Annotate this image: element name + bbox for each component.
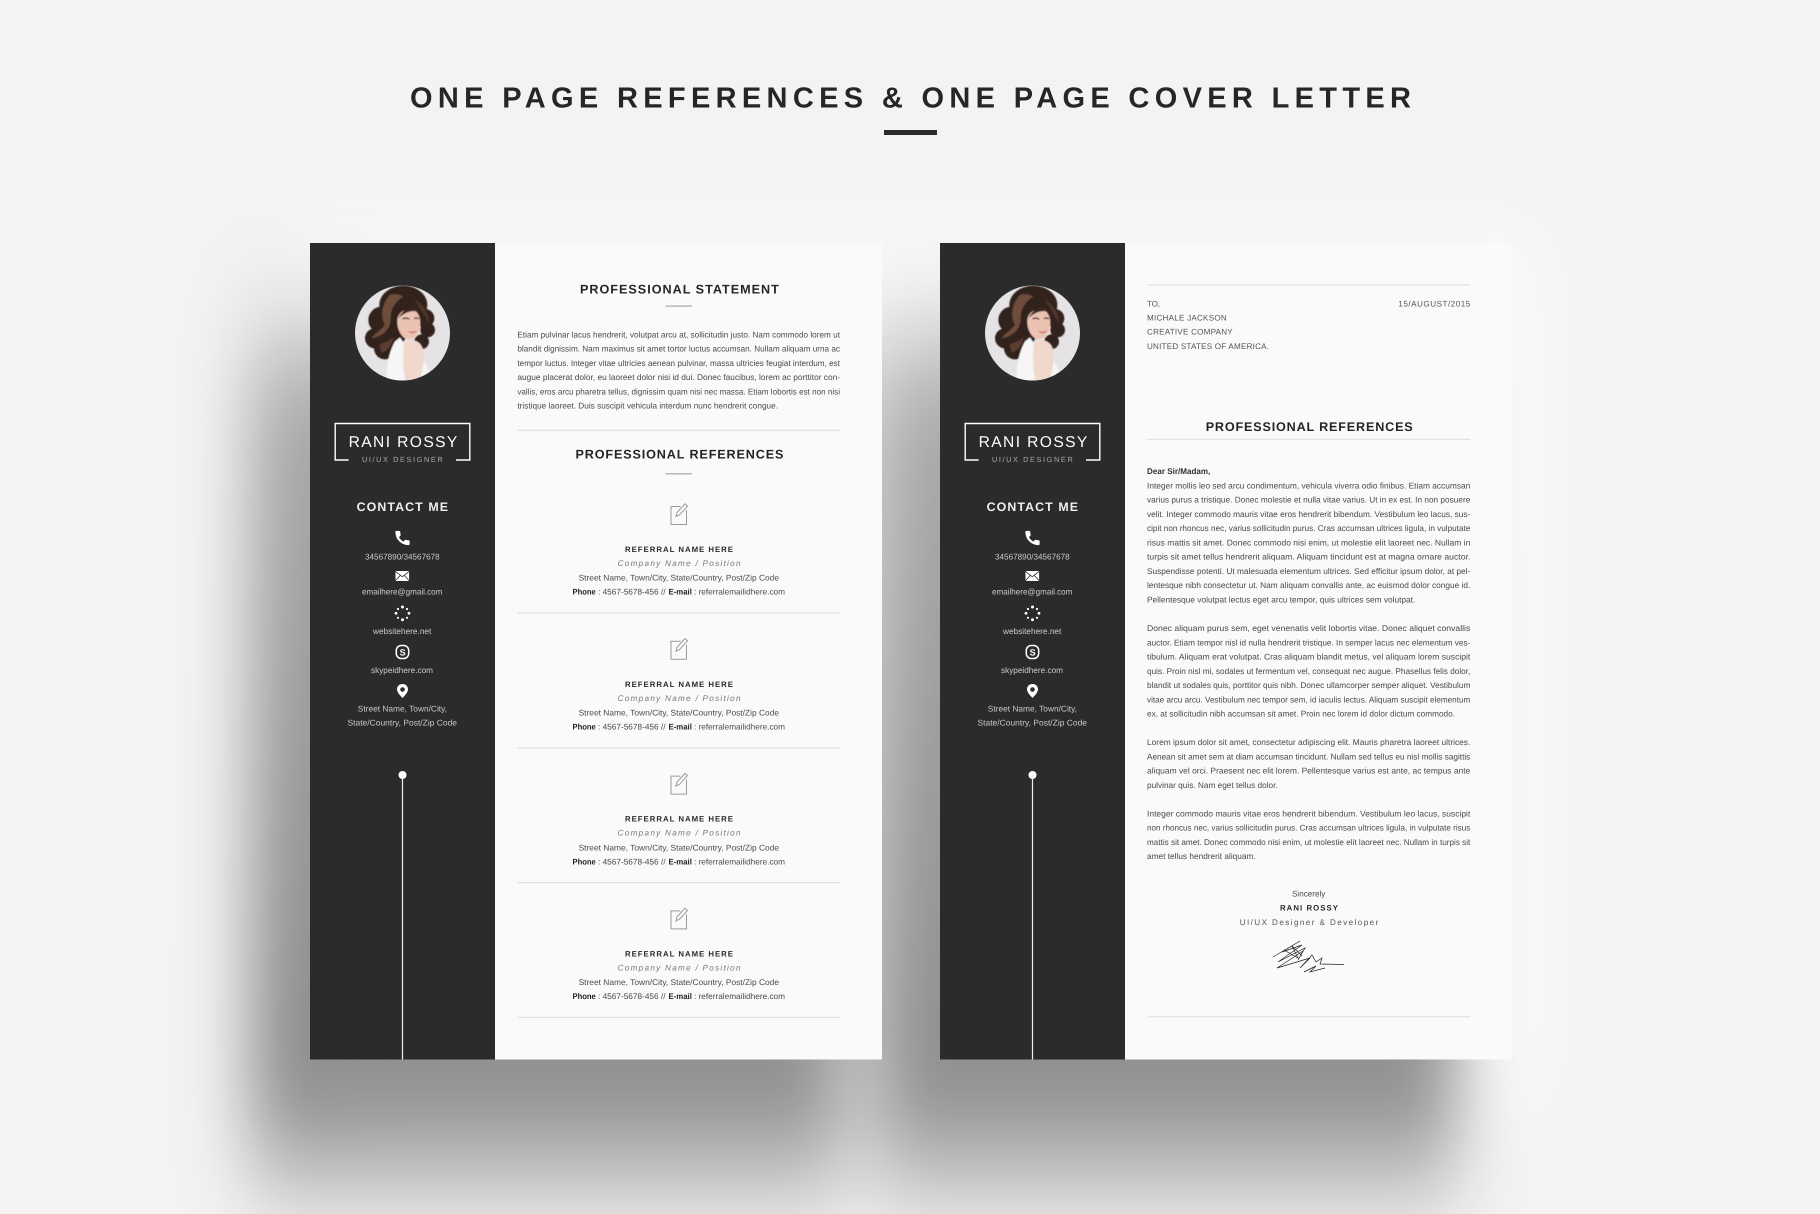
statement paragraph (517, 329, 841, 410)
reference 3: Company Name / Position (618, 829, 741, 838)
icon: phone (396, 531, 409, 545)
reference 2: Street Name, Town/City, State/Country, Post/Zip Code (579, 709, 779, 718)
reference 3: : 4567-5678-456 // (598, 857, 666, 866)
letter paragraph 2: ex, at sollicitudin nibh accumsan sit amet. Proin nec lorem id dolor dictum commodo. (1147, 708, 1455, 718)
letter paragraph 4: non rhoncus nec, varius sollicitudin purus. Cras accumsan ultrices ligula, in vulputate risus (1147, 822, 1470, 832)
reference 3: E-mail (668, 857, 692, 866)
icon: skype (1026, 646, 1039, 658)
reference 4: REFERRAL NAME HERE (625, 949, 733, 958)
icon: mail (396, 571, 409, 581)
salutation: Dear Sir/Madam, (1147, 466, 1210, 476)
icon: mail (1026, 571, 1039, 581)
letter paragraph 1: velit. Integer commodo mauris vitae eros hendrerit bibendum. Vestibulum leo lacus, sus- (1147, 509, 1471, 519)
title underline (884, 130, 937, 135)
sheet background (310, 243, 882, 1060)
sign-off: Sincerely (1292, 888, 1326, 898)
contact list: 34567890/34567678 (365, 551, 440, 561)
recipient block (1147, 299, 1269, 351)
reference 1: Company Name / Position (618, 559, 741, 568)
name box (965, 424, 1100, 464)
letter paragraph 2: quis. Proin nisl mi, sodales ut fermentum vel, consequat nec augue. Phasellus felis dolor, (1147, 666, 1470, 676)
icon: location pin (397, 684, 408, 698)
icon: note and pencil (671, 908, 688, 929)
name box: UI/UX DESIGNER (362, 455, 443, 464)
profile photo (985, 286, 1080, 383)
icon: website (1025, 606, 1040, 621)
icon: note and pencil (671, 773, 688, 794)
statement paragraph: augue placerat dolor, eu laoreet dolor nisi id dui. Donec faucibus, lorem ac porttitor con- (517, 372, 840, 382)
contact list (348, 531, 457, 728)
soft white glow behind sheets (300, 225, 1540, 1115)
contact list: skypeidhere.com (1001, 665, 1063, 675)
contact list: Street Name, Town/City, (358, 704, 447, 714)
letter paragraph 3: pulvinar quis. Nam eget tellus dolor. (1147, 780, 1278, 790)
reference 2: Phone (572, 723, 596, 732)
reference 4: Street Name, Town/City, State/Country, Post/Zip Code (579, 978, 779, 987)
statement paragraph: tempor luctus. Integer vitae ultricies aenean pulvinar, massa ultricies feugiat interdum, est (517, 358, 841, 368)
reference 3 (517, 773, 840, 883)
contact list: websitehere.net (372, 626, 432, 636)
letter paragraph 3: Aenean sit amet sem at diam accumsan tincidunt. Nullam sed tellus eu nisl mollis sagittis (1147, 751, 1470, 761)
contact list: Street Name, Town/City, (988, 704, 1077, 714)
reference 1: : referralemailidhere.com (694, 588, 785, 597)
heading: professional statement: PROFESSIONAL STATEMENT (580, 282, 779, 296)
letter paragraph 2: auctor. Etiam tempor nisl id nulla hendrerit tristique. In semper lacus nec elementum ves- (1147, 637, 1471, 647)
reference 4: E-mail (668, 992, 692, 1001)
heading: professional references: PROFESSIONAL REFERENCES (576, 448, 783, 462)
letter paragraph 3: Lorem ipsum dolor sit amet, consectetur adipiscing elit. Mauris pharetra laoreet ultrices. (1147, 737, 1470, 747)
reference 2: Company Name / Position (618, 694, 741, 703)
contact list: skypeidhere.com (371, 665, 433, 675)
letter paragraph 3 (1147, 737, 1471, 790)
signature (1273, 941, 1344, 972)
icon: skype: S (400, 647, 406, 657)
icon: phone (1026, 531, 1039, 545)
reference 2: : 4567-5678-456 // (598, 723, 666, 732)
reference 1: E-mail (668, 588, 692, 597)
letter paragraph 1 (1147, 480, 1471, 604)
reference 1: Street Name, Town/City, State/Country, Post/Zip Code (579, 574, 779, 583)
sign-off: RANI ROSSY (1280, 904, 1339, 913)
reference 4: : 4567-5678-456 // (598, 992, 666, 1001)
icon: location pin (1027, 684, 1038, 698)
letter paragraph 1: cipit non rhoncus nec, varius sollicitudin purus. Cras accumsan ultrices ligula, in vulputate (1147, 523, 1471, 533)
letter paragraph 2: Donec aliquam purus sem, eget venenatis velit lobortis vitae. Donec aliquet convallis (1147, 623, 1470, 633)
icon: skype: S (1030, 647, 1036, 657)
sign-off (1240, 888, 1379, 927)
title: ONE PAGE REFERENCES & ONE PAGE COVER LETTER (410, 82, 1411, 114)
letter paragraph 1: varius purus a tristique. Donec molestie et nulla vitae varius. Ut in ex est. In non posuere (1147, 495, 1471, 505)
name box: RANI ROSSY (349, 434, 458, 451)
name box: RANI ROSSY (979, 434, 1088, 451)
recipient block: MICHALE JACKSON (1147, 313, 1227, 322)
sign-off: UI/UX Designer & Developer (1240, 918, 1379, 927)
timeline line and dot (398, 771, 406, 1060)
contact list: State/Country, Post/Zip Code (348, 718, 457, 728)
timeline line and dot (1028, 771, 1036, 1060)
sidebar (940, 243, 1125, 1060)
letter paragraph 4: mattis sit amet. Donec commodo nisi enim, ut molestie elit laoreet nec. Nullam in turpis sit (1147, 837, 1471, 847)
reference 1: : 4567-5678-456 // (598, 588, 666, 597)
panel: cover letter sheet (940, 243, 1512, 1060)
reference 2: E-mail (668, 723, 692, 732)
letter paragraph 2: vitae arcu arcu. Vestibulum nec tempor sem, id iaculis lectus. Aliquam suscipit elementum (1147, 694, 1470, 704)
letter paragraph 1: Pellentesque volutpat lectus eget arcu tempor, quis ultrices sem volutpat. (1147, 594, 1415, 604)
reference 4 (517, 908, 840, 1018)
letter paragraph 1: lentesque nibh consectetur ut. Nam aliquam convallis ante, ac euismod dolor congue id. (1147, 580, 1470, 590)
sheet background (940, 243, 1512, 1060)
reference 4: Phone (572, 992, 596, 1001)
date: 15/AUGUST/2015 (1398, 299, 1471, 308)
letter paragraph 4: amet tellus hendrerit aliquam. (1147, 851, 1256, 861)
contact list: State/Country, Post/Zip Code (978, 718, 1087, 728)
letter paragraph 1: Suspendisse potenti. Ut malesuada elementum ultrices. Sed efficitur ipsum dolor, at pel- (1147, 566, 1471, 576)
sidebar (310, 243, 495, 1060)
name box: UI/UX DESIGNER (992, 455, 1073, 464)
statement paragraph: blandit dignissim. Nam maximus sit amet tortor luctus accumsan. Nullam aliquam urna ac (517, 344, 840, 354)
contact list (978, 531, 1087, 728)
recipient block: TO, (1147, 299, 1160, 308)
reference 2 (517, 639, 840, 748)
reference 2: REFERRAL NAME HERE (625, 680, 733, 689)
contact list: websitehere.net (1002, 626, 1062, 636)
letter paragraph 2: tibulum. Aliquam erat volutpat. Cras aliquam blandit metus, vel aliquam lorem suscipit (1147, 652, 1471, 662)
profile photo (355, 286, 450, 383)
letter paragraph 1: risus mattis sit amet. Donec commodo nisi enim, ut molestie elit laoreet nec. Nullam in (1147, 537, 1471, 547)
reference 3: REFERRAL NAME HERE (625, 815, 733, 824)
contact heading: CONTACT ME (987, 500, 1078, 514)
letter paragraph 2: blandit ut sodales quis, porttitor quis nibh. Donec ullamcorper semper aliquet. Vestibulum (1147, 680, 1470, 690)
reference 3: : referralemailidhere.com (694, 857, 785, 866)
heading: professional references: PROFESSIONAL REFERENCES (1206, 420, 1413, 434)
letter paragraph 4: Integer commodo mauris vitae eros hendrerit bibendum. Vestibulum leo lacus, suscipit (1147, 808, 1471, 818)
drop shadows (250, 340, 1458, 1165)
reference 4: Company Name / Position (618, 963, 741, 972)
name box (335, 424, 470, 464)
contact list: 34567890/34567678 (995, 551, 1070, 561)
letter paragraph 1: turpis sit amet tellus hendrerit aliquam. Aliquam tincidunt est at magna ornare auctor. (1147, 552, 1470, 562)
letter paragraph 2 (1147, 623, 1471, 718)
contact heading: CONTACT ME (357, 500, 448, 514)
letter paragraph 4 (1147, 808, 1471, 861)
reference 4: : referralemailidhere.com (694, 992, 785, 1001)
reference 2: : referralemailidhere.com (694, 723, 785, 732)
statement paragraph: tristique laoreet. Duis suscipit vehicula interdum nunc hendrerit congue. (517, 400, 778, 410)
reference 3: Phone (572, 857, 596, 866)
icon: skype (396, 646, 409, 658)
reference 1: Phone (572, 588, 596, 597)
icon: website (395, 606, 410, 621)
icon: note and pencil (671, 639, 688, 659)
recipient block: CREATIVE COMPANY (1147, 328, 1233, 337)
icon: note and pencil (671, 504, 688, 524)
statement paragraph: Etiam pulvinar lacus hendrerit, volutpat arcu at, sollicitudin justo. Nam commodo lorem ut (517, 329, 841, 339)
recipient block: UNITED STATES OF AMERICA. (1147, 342, 1269, 351)
letter paragraph 3: aliquam vel orci. Praesent nec elit lorem. Pellentesque varius est ante, ac tempus ante (1147, 766, 1471, 776)
statement paragraph: vallis, eros arcu pharetra tellus, dignissim quam nisi nec massa. Etiam lobortis est non nisi (517, 386, 840, 396)
contact list: emailhere@gmail.com (992, 587, 1072, 597)
letter paragraph 1: Integer mollis leo sed arcu condimentum, vehicula viverra odio finibus. Etiam accumsan (1147, 480, 1471, 490)
panel: references sheet (310, 243, 882, 1060)
contact list: emailhere@gmail.com (362, 587, 442, 597)
reference 1 (517, 504, 840, 614)
reference 3: Street Name, Town/City, State/Country, Post/Zip Code (579, 843, 779, 852)
reference 1: REFERRAL NAME HERE (625, 545, 733, 554)
